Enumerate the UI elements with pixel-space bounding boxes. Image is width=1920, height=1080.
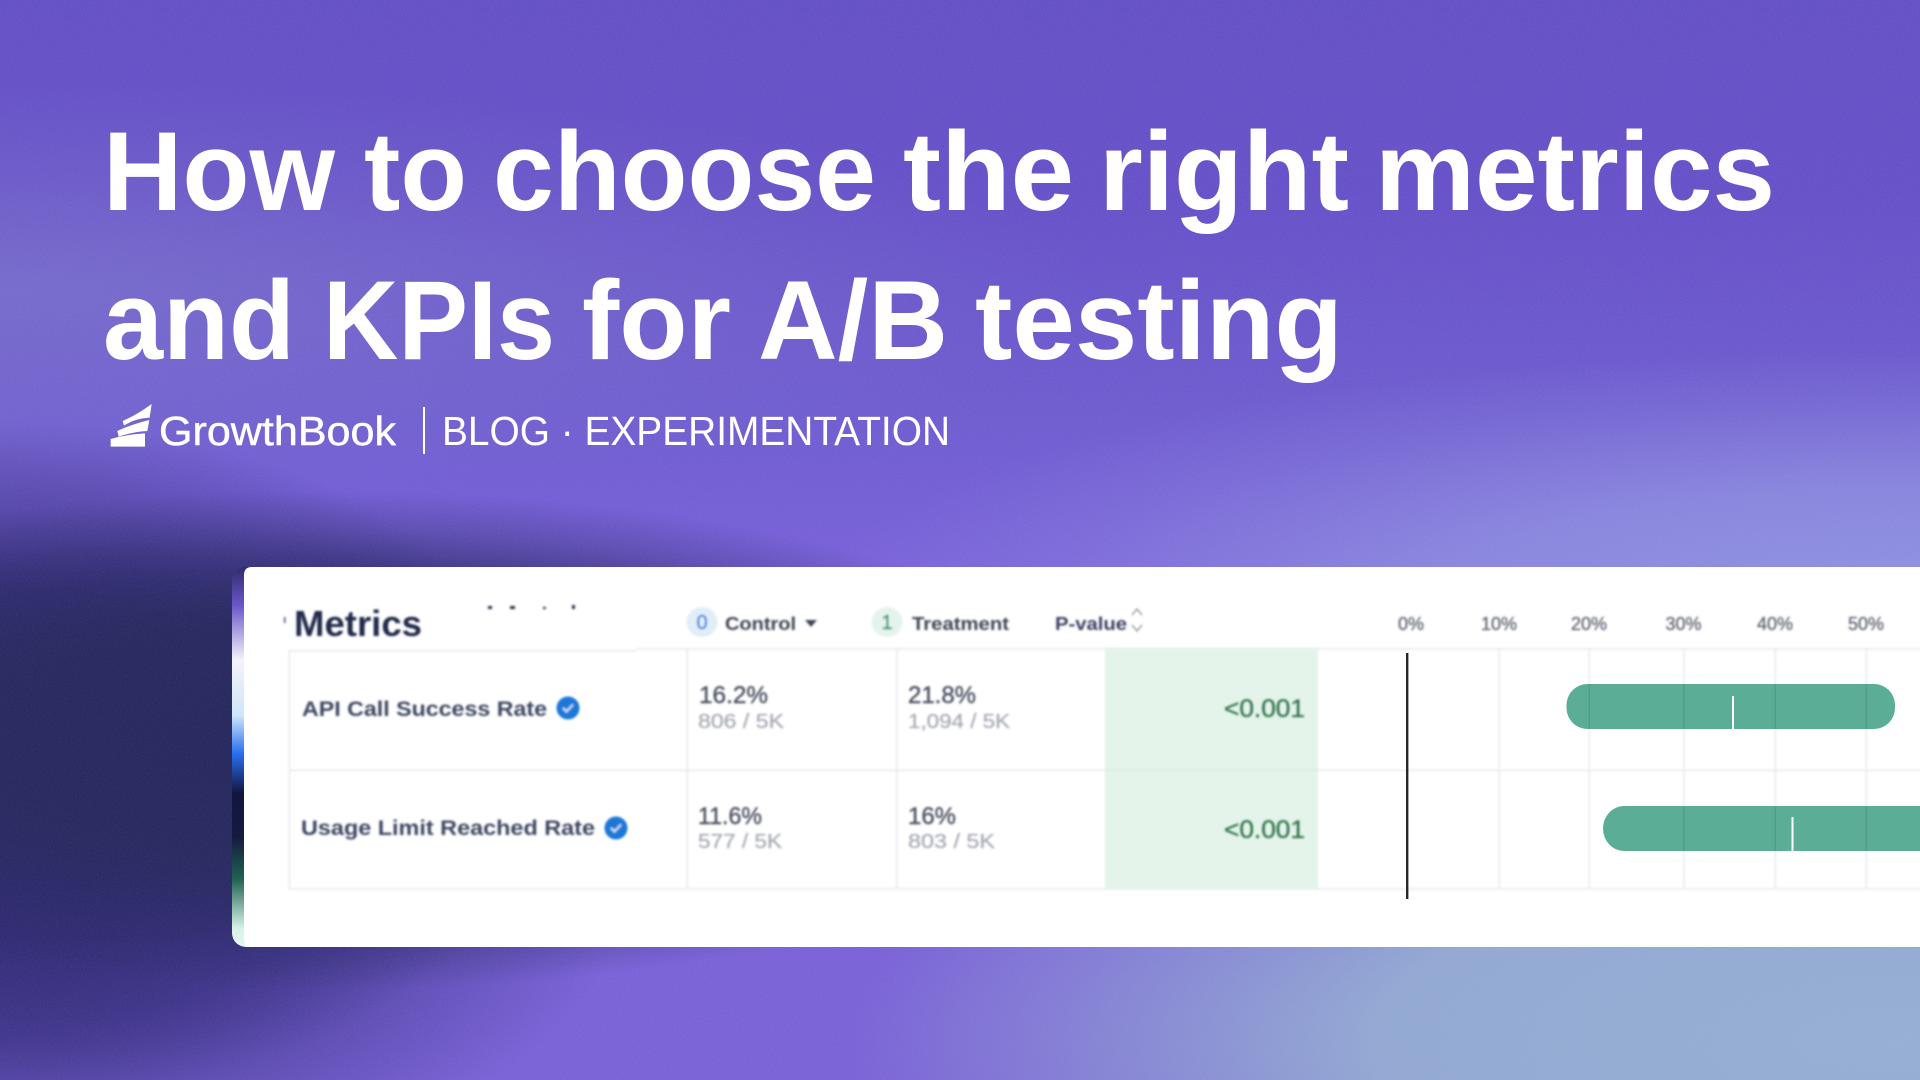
column header: p-value xyxy=(1055,609,1142,634)
chart gridlines xyxy=(1498,648,1867,889)
row: API Call Success Rate: 21.8% xyxy=(908,682,976,709)
icon: verified badge xyxy=(604,816,628,840)
column header: control variation xyxy=(686,607,817,637)
title: right xyxy=(1099,109,1349,234)
brand name: GrowthBook xyxy=(159,408,397,454)
axis labels: 30% xyxy=(1665,614,1702,634)
icon: verified badge xyxy=(556,696,580,720)
heading: Metrics: Metrics xyxy=(294,603,422,644)
row: API Call Success Rate: 1,094 / 5K xyxy=(908,711,1011,733)
bar: API Call Success Rate interval xyxy=(1566,684,1895,729)
axis labels: 40% xyxy=(1757,614,1793,634)
column header: treatment variation xyxy=(872,607,1009,637)
axis labels: 50% xyxy=(1848,614,1884,634)
chart: lift confidence intervals xyxy=(1406,648,1920,899)
card body xyxy=(244,567,1920,947)
title: choose xyxy=(493,109,876,234)
title: to xyxy=(364,109,467,234)
row: API Call Success Rate: <0.001 xyxy=(1224,695,1305,723)
category label: BLOG · EXPERIMENTATION xyxy=(442,408,950,454)
panel: metrics results card xyxy=(232,567,1920,947)
bar: Usage Limit Reached Rate interval xyxy=(1603,806,1920,851)
row: Usage Limit Reached Rate: 16% xyxy=(908,803,956,830)
column header: p-value: P-value xyxy=(1055,614,1127,634)
zero baseline xyxy=(1406,653,1408,899)
p-value highlight column xyxy=(1105,648,1318,889)
card gradient edge xyxy=(232,567,272,947)
column header: treatment variation: Treatment xyxy=(912,614,1009,634)
row: Usage Limit Reached Rate: Usage Limit Reached Rate xyxy=(301,817,595,840)
divider xyxy=(423,407,425,454)
title: How xyxy=(103,109,336,234)
title: metrics xyxy=(1375,109,1775,234)
title: KPIs xyxy=(323,258,555,383)
title xyxy=(103,109,1775,383)
gridlines over bars xyxy=(1588,684,1867,851)
table grid xyxy=(288,648,1920,890)
column header: control variation: Control xyxy=(725,614,796,634)
row: Usage Limit Reached Rate xyxy=(301,803,1305,853)
icon: GrowthBook logo xyxy=(111,404,152,447)
axis labels: 0% xyxy=(1398,614,1424,634)
title: testing xyxy=(975,258,1343,383)
heading: Metrics xyxy=(284,603,575,644)
title: the xyxy=(903,109,1074,234)
axis labels: 20% xyxy=(1571,614,1607,634)
column header: control variation: 0 xyxy=(696,612,708,634)
axis labels xyxy=(1398,614,1884,634)
row: Usage Limit Reached Rate: 803 / 5K xyxy=(908,831,996,853)
row: API Call Success Rate: 806 / 5K xyxy=(698,711,785,733)
row: Usage Limit Reached Rate: 577 / 5K xyxy=(698,831,783,853)
row: Usage Limit Reached Rate: <0.001 xyxy=(1224,816,1305,844)
row: API Call Success Rate: 16.2% xyxy=(699,682,768,709)
row: API Call Success Rate: API Call Success Rate xyxy=(302,698,547,721)
axis labels: 10% xyxy=(1481,614,1517,634)
title: A/B xyxy=(758,258,948,383)
title: and xyxy=(103,258,295,383)
row: Usage Limit Reached Rate: 11.6% xyxy=(698,803,762,830)
title: for xyxy=(582,258,731,383)
column header: treatment variation: 1 xyxy=(881,612,893,634)
row: API Call Success Rate xyxy=(302,682,1305,733)
brand row xyxy=(111,404,950,454)
